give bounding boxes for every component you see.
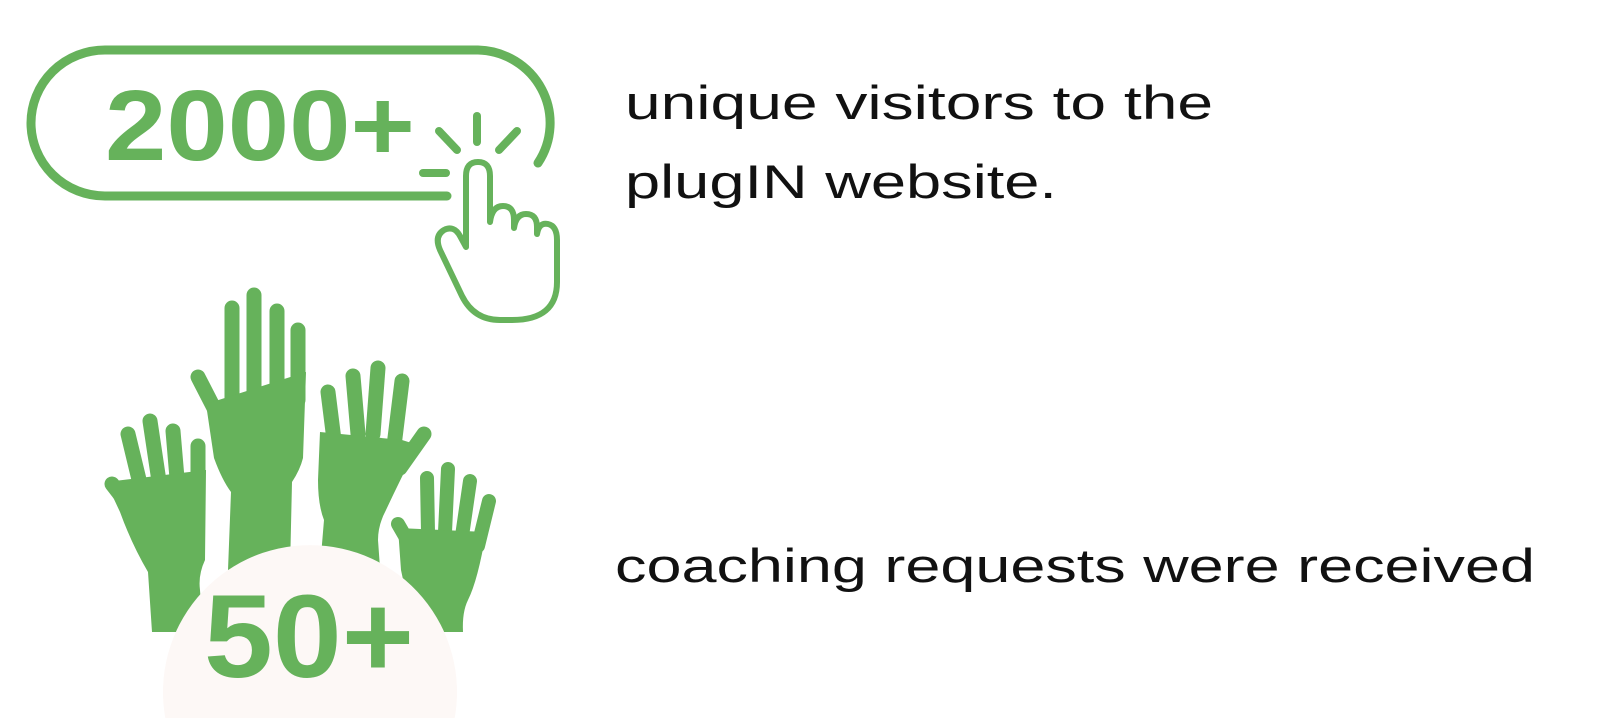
pill outline [31, 50, 550, 196]
circle badge [163, 545, 457, 718]
hand right [398, 469, 489, 632]
stat number: 2000+: 2000+ [105, 70, 415, 182]
text: plugIN website. [625, 155, 1057, 208]
icon: click button with 2000+ [31, 50, 557, 320]
text: visitors description: unique visitors to the [625, 76, 1213, 129]
text: coaching description: coaching requests were received [615, 539, 1535, 592]
hand center right [318, 368, 424, 568]
pointing hand [438, 162, 557, 320]
hand center tall [198, 295, 306, 570]
hand left [106, 421, 206, 632]
icon: raised hands with 50+ [106, 295, 489, 718]
click sparks [423, 116, 517, 173]
stat number: 50+: 50+ [204, 571, 414, 703]
